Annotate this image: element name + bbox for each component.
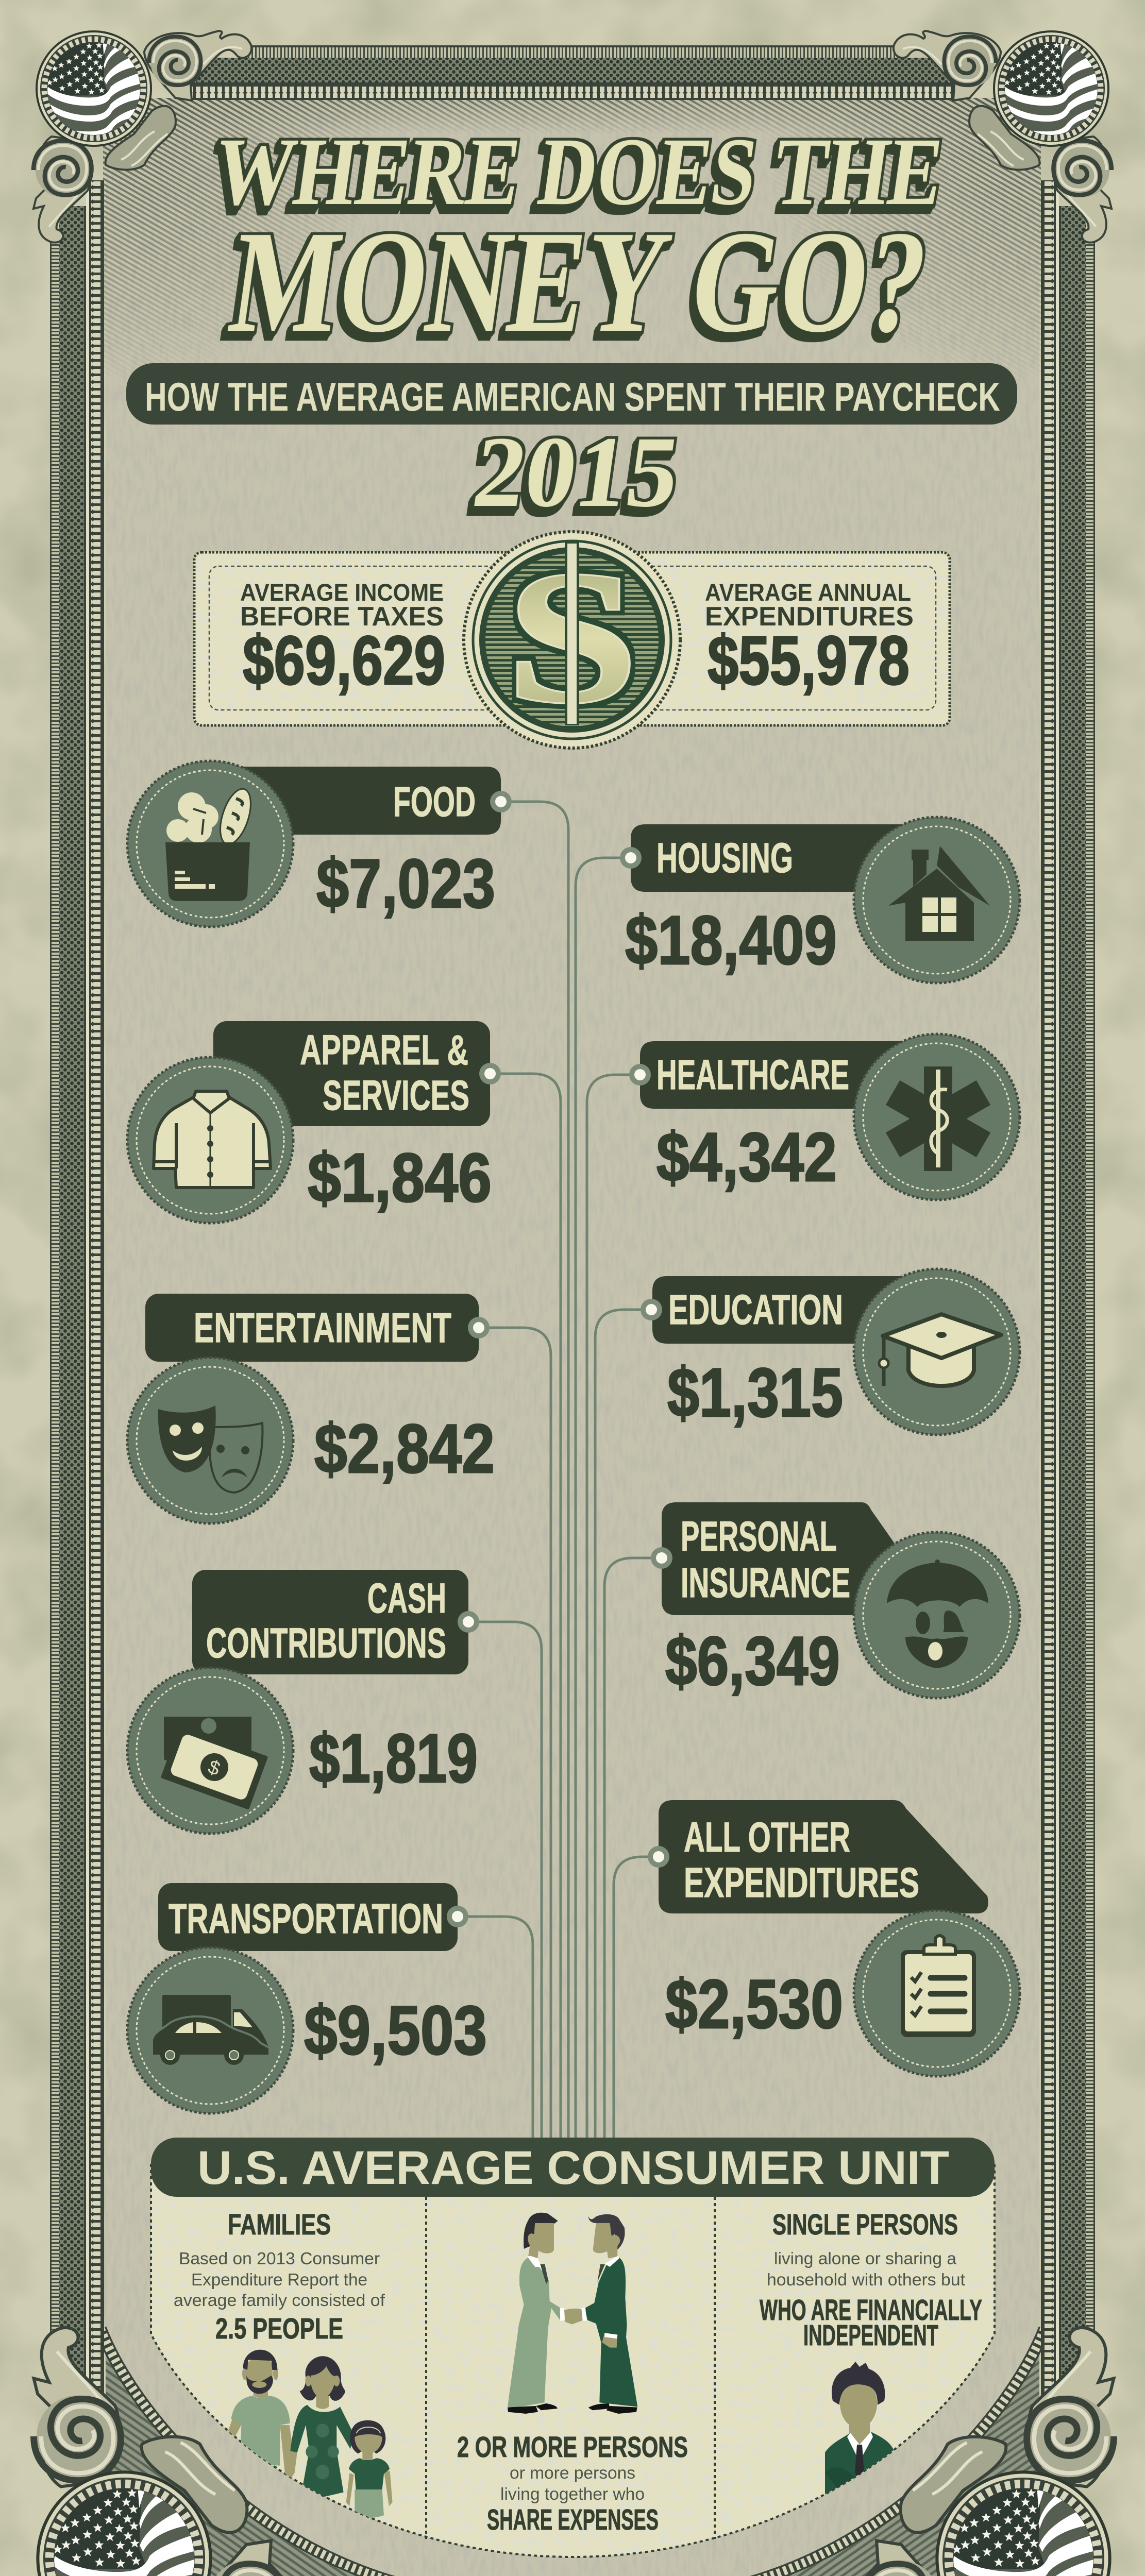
label tab [652,1276,917,1344]
value: $4,342 [656,1119,837,1196]
icon: bottom right flag medallion [935,2470,1112,2576]
single heading: SINGLE PERSONS [772,2208,958,2241]
persons body: or more persons [510,2463,635,2482]
connector node [620,847,642,869]
icon: bottom left flag medallion [36,2470,212,2576]
icon: dollar emblem: S [506,533,638,742]
panel: housing [620,817,1020,983]
icon: dollar bills: $ [205,1756,223,1780]
label tab [145,1294,479,1362]
label tab [227,767,501,835]
value: $1,846 [308,1140,492,1216]
panel: cash contributions [127,1570,479,1834]
frame: left column [50,180,104,2416]
badge [854,1910,1020,2076]
value: $1,819 [309,1720,478,1797]
single body: living alone or sharing a [774,2249,957,2268]
persons emphasis: SHARE EXPENSES [487,2503,659,2536]
connector node [479,1063,501,1084]
illustration: single man [825,2362,895,2514]
persons heading: 2 OR MORE PERSONS [457,2431,688,2464]
value: $18,409 [625,902,837,979]
label tab [640,1041,917,1109]
heading bar: U.S. AVERAGE CONSUMER UNIT [197,2142,949,2194]
frame: top band [191,45,954,100]
families stat: 2.5 PEOPLE [215,2312,343,2345]
families body: Expenditure Report the [191,2270,367,2289]
badge [854,1532,1020,1698]
year: 2015 [467,416,686,528]
label tab [158,1883,458,1951]
ornament: bottom right scrollwork [787,2328,1114,2576]
value: $2,530 [665,1966,843,2043]
connector node [447,1906,468,1927]
panel: education [641,1269,1020,1435]
expenditures label: AVERAGE ANNUAL [705,579,911,606]
label text: CASH [367,1575,446,1622]
connector node [629,1064,651,1086]
label text line two: CONTRIBUTIONS [206,1620,446,1667]
title line two: MONEY GO? [221,200,937,363]
expenditures value: $55,978 [708,622,910,699]
label text line two: EXPENDITURES [684,1859,919,1906]
label text: HEALTHCARE [656,1052,849,1098]
single emphasis: WHO ARE FINANCIALLY [760,2294,982,2327]
label text line two: SERVICES [323,1072,469,1119]
label tab [662,1502,896,1615]
icon: graduation cap [879,1314,1001,1386]
single body: household with others but [767,2270,965,2289]
single body [767,2249,965,2289]
subtitle pill [126,363,1017,425]
badge [127,761,293,927]
label text line two: INSURANCE [681,1560,850,1606]
label text: ALL OTHER [684,1814,850,1861]
label tab [192,1570,468,1674]
badge [854,1269,1020,1435]
panel: apparel and services [127,1021,501,1223]
label tab [631,824,917,892]
frame: lower left corner engraving [100,2329,433,2576]
income value: $69,629 [243,622,445,699]
frame: lower right corner engraving [712,2329,1045,2576]
panel: food [127,761,512,927]
connector node [490,791,512,812]
icon: dollar bills [161,1717,268,1810]
ornament: top right scrollwork [894,31,1112,243]
icon: shirt [154,1091,271,1188]
single emphasis line two: INDEPENDENT [803,2319,938,2352]
badge [127,1668,293,1834]
illustration: handshake [508,2213,637,2414]
connector node [651,1547,672,1569]
column: families [174,2208,393,2518]
families body: Based on 2013 Consumer [179,2249,380,2268]
panel: all other expenditures [648,1800,1020,2076]
panel: entertainment [127,1294,495,1523]
value: $7,023 [316,845,495,922]
icon: top right flag medallion [993,30,1109,147]
label tab [213,1021,490,1126]
value: $9,503 [304,1992,487,2069]
icon: theatre masks [158,1405,262,1493]
badge [127,1358,293,1523]
families body [174,2249,385,2310]
value: $1,315 [667,1354,843,1431]
persons body [500,2463,645,2503]
families body: average family consisted of [174,2291,385,2310]
connector node [468,1317,490,1338]
label text: HOUSING [656,835,793,882]
badge [854,1034,1020,1200]
panel: income and expenditures [194,552,950,725]
persons body: living together who [500,2484,645,2503]
ornament: top left scrollwork [33,31,251,243]
connector node [641,1299,662,1320]
icon: umbrella over family [887,1560,988,1668]
icon: star of life [886,1066,990,1171]
label text: ENTERTAINMENT [194,1304,451,1351]
icon: house [888,846,990,941]
title [208,118,950,363]
guilloche inner panel [103,98,1041,2576]
label text: APPAREL & [300,1027,468,1074]
illustration: family [228,2350,393,2518]
connector node [458,1611,479,1633]
label text: TRANSPORTATION [169,1895,443,1942]
label tab [659,1800,988,1913]
icon: truck and car [152,1995,270,2065]
icon: dollar emblem [464,532,680,748]
families heading: FAMILIES [228,2208,331,2241]
label text: FOOD [393,778,476,825]
badge [127,1947,293,2113]
panel: consumer unit bowl [151,2138,995,2561]
connector lines [458,802,662,2148]
expenditures label line two: EXPENDITURES [705,602,914,632]
value: $6,349 [665,1623,840,1700]
value: $2,842 [314,1411,495,1487]
panel: transportation [127,1883,487,2113]
frame: right column [1041,180,1095,2416]
icon: clipboard [901,1936,976,2037]
title line one: WHERE DOES THE [208,118,950,225]
income label line two: BEFORE TAXES [240,602,444,632]
connector node [648,1846,669,1868]
label text: EDUCATION [668,1286,843,1333]
badge [127,1057,293,1223]
icon: grocery bag [165,785,257,901]
panel: healthcare [629,1034,1020,1200]
label text: PERSONAL [681,1513,837,1560]
income label: AVERAGE INCOME [240,579,444,606]
badge [854,817,1020,983]
panel: personal insurance [651,1502,1020,1700]
icon: top left flag medallion [36,30,152,147]
column: two or more persons [457,2213,688,2536]
column: single persons [760,2208,982,2514]
ornament: bottom left scrollwork [34,2328,361,2576]
